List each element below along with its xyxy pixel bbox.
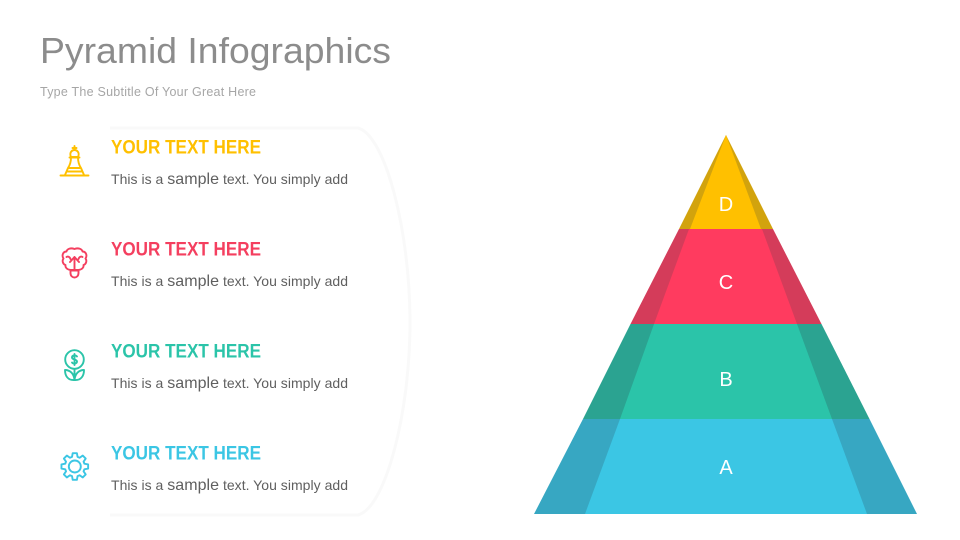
tier C: C [719, 272, 733, 294]
icon: chess king [60, 146, 88, 176]
panel: text list background [110, 128, 410, 515]
heading: YOUR TEXT HERE [111, 240, 261, 260]
tier D [679, 135, 773, 229]
text block: This is a sample text. You simply add [111, 273, 348, 290]
list item: A [61, 444, 348, 494]
list item: D [60, 138, 348, 188]
text block: This is a sample text. You simply add [111, 375, 348, 392]
tier A: A [719, 457, 733, 479]
tier A [534, 419, 917, 514]
tier D: D [719, 194, 733, 216]
heading: YOUR TEXT HERE [111, 444, 261, 464]
text block: This is a sample text. You simply add [111, 171, 348, 188]
text block: This is a sample text. You simply add [111, 477, 348, 494]
tier C [630, 229, 822, 324]
icon: gear [61, 453, 88, 480]
list item: B [65, 342, 348, 392]
heading: YOUR TEXT HERE [111, 342, 261, 362]
tier B: B [719, 369, 733, 391]
tier B [583, 324, 870, 419]
subtitle: Type The Subtitle Of Your Great Here [40, 85, 256, 99]
icon: money plant [65, 350, 84, 380]
pyramid chart [534, 135, 917, 514]
title: Pyramid Infographics [40, 30, 391, 71]
list item: C [63, 240, 348, 290]
icon: brain bulb [63, 248, 86, 278]
heading: YOUR TEXT HERE [111, 138, 261, 158]
